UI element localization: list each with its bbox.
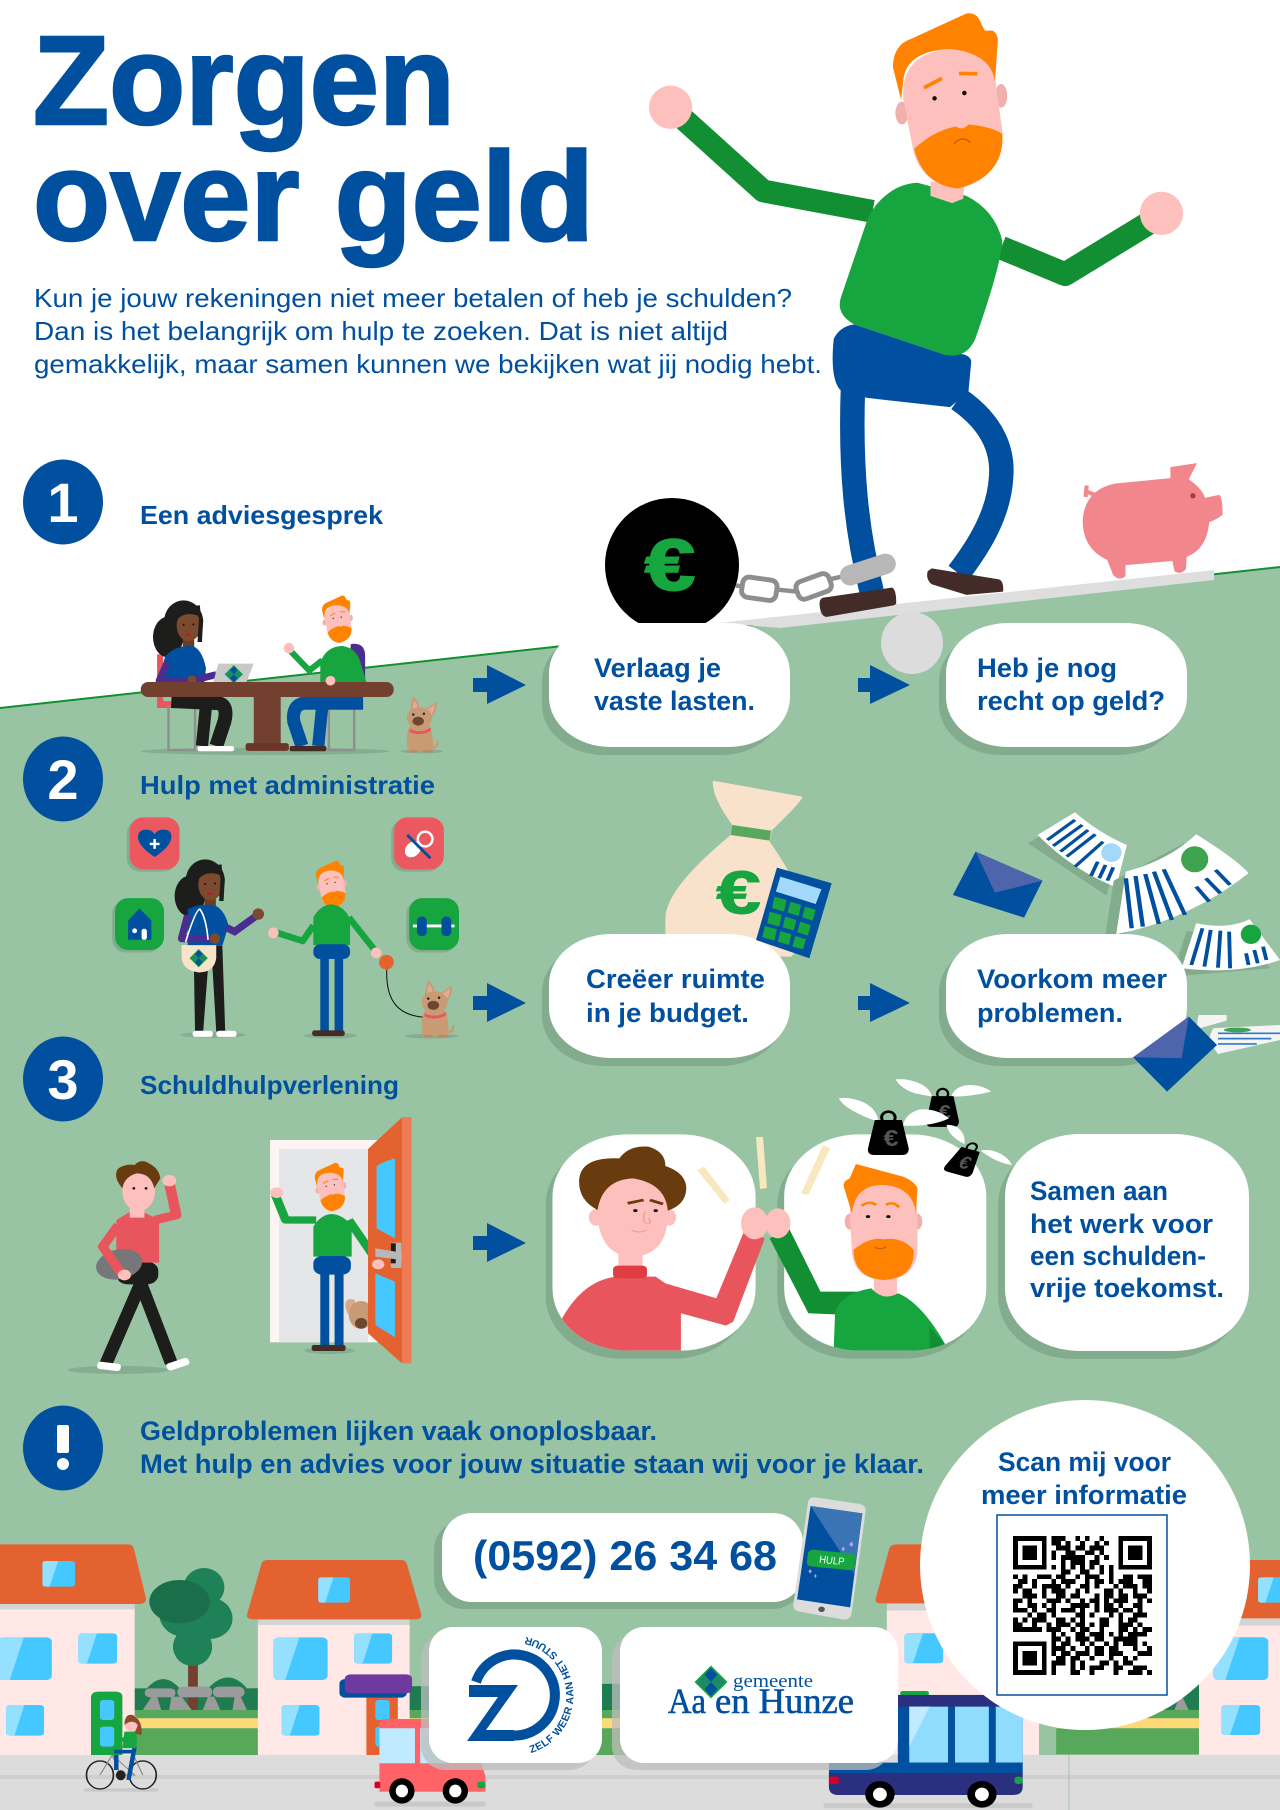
step 2 number: 2 (47, 748, 79, 811)
bubble: Verlaag je vaste lasten (542, 623, 790, 755)
title: over geld (33, 126, 594, 267)
arrow 2a (473, 983, 526, 1022)
open door with man and dog (270, 1117, 411, 1363)
logo box: gemeente Aa en Hunze: en Hunze (715, 1681, 854, 1721)
step 1 number (23, 460, 103, 544)
icon: dumbbell (406, 898, 459, 952)
phone number bubble (434, 1513, 803, 1609)
bus (824, 1691, 1032, 1808)
QR code (1013, 1538, 1152, 1673)
house 3 (876, 1544, 1044, 1755)
dolmen stones (143, 1687, 247, 1710)
cyclist (84, 1715, 158, 1792)
bubble: Voorkom meer problemen: problemen. (977, 998, 1123, 1028)
step 2 illustration (112, 817, 459, 1039)
bill 1 (1028, 812, 1127, 896)
QR circle panel: Scan mij voor (998, 1447, 1171, 1477)
envelope with bills, lower right (1133, 1015, 1280, 1092)
house 4 (1199, 1560, 1280, 1755)
street (0, 1755, 1280, 1810)
bubble: Heb je nog recht op geld (939, 623, 1187, 755)
title (33, 10, 594, 267)
man with dog leash (268, 861, 424, 1039)
arrow 1a (473, 665, 526, 704)
phone with HULP button (793, 1497, 866, 1620)
intro text: gemakkelijk, maar samen kunnen we bekijken wat jij nodig hebt. (34, 349, 822, 379)
bubble: person in red high five (546, 1134, 765, 1359)
bubble: Voorkom meer problemen (939, 934, 1187, 1066)
bill 2 (1104, 834, 1249, 943)
garden and hedge (135, 1677, 889, 1755)
logo box: gemeente Aa en Hunze (612, 1627, 898, 1770)
seesaw plank and pivot (719, 570, 1214, 674)
money bag with euro: € (716, 859, 761, 926)
step 1 heading: Een adviesgesprek (140, 500, 384, 530)
bubble: Verlaag je vaste lasten: vaste lasten. (594, 686, 755, 716)
bubble: man in green high five (770, 1134, 986, 1359)
bubble: Samen aan het werk: het werk voor (1030, 1209, 1214, 1239)
big worried man (649, 13, 1183, 617)
QR circle panel: meer informatie (981, 1480, 1187, 1510)
intro text (34, 283, 822, 379)
closing message (140, 1416, 924, 1479)
logo box: Zelf weer aan het stuur (421, 1627, 602, 1770)
money ball and chain (605, 498, 739, 632)
bubble: Samen aan het werk (998, 1134, 1249, 1359)
dog (405, 980, 458, 1039)
logo box: Zelf weer aan het stuur: ZELF WEER AAN HET STUUR (524, 1636, 574, 1753)
bubble: Verlaag je vaste lasten: Verlaag je (594, 653, 721, 683)
walking person in red (67, 1161, 191, 1374)
tree (149, 1568, 233, 1710)
fist bump (741, 1207, 790, 1239)
step 1 number: 1 (47, 471, 79, 534)
flying debt weights with wings (839, 1079, 1012, 1178)
village scene right (824, 1544, 1280, 1808)
closing message: Met hulp en advies voor jouw situatie staan wij voor je klaar. (140, 1449, 924, 1479)
icon: pacifier (391, 817, 444, 872)
arrow 1b (858, 665, 910, 704)
step 3 heading: Schuldhulpverlening (140, 1070, 399, 1100)
piggy bank (1083, 463, 1223, 579)
bubble: Creeer ruimte in je budget: Creëer ruimte (586, 964, 765, 994)
garden behind circle (1056, 1683, 1199, 1754)
bubble: Voorkom meer problemen: Voorkom meer (977, 964, 1167, 994)
phone number bubble: (0592) 26 34 68 (473, 1532, 777, 1579)
house 1 (0, 1544, 146, 1755)
bubble: Samen aan het werk: vrije toekomst. (1030, 1273, 1224, 1303)
step 1 illustration: advice meeting (141, 596, 443, 755)
bills and envelope scattered (953, 812, 1280, 977)
bubble: Samen aan het werk: een schulden- (1030, 1241, 1206, 1271)
phone with HULP button: HULP (818, 1554, 846, 1568)
step 2 heading: Hulp met administratie (140, 770, 435, 800)
title: Zorgen (33, 10, 455, 151)
bubble: Samen aan het werk: Samen aan (1030, 1176, 1168, 1206)
bubble: Heb je nog recht op geld: recht op geld? (977, 686, 1165, 716)
icon: heart (127, 817, 180, 872)
money bag with euro (665, 781, 811, 957)
bubble: Creeer ruimte in je budget (542, 934, 790, 1066)
green background with sloped hill (0, 567, 1280, 1810)
gap in garden (1039, 1710, 1056, 1755)
bubble: Creeer ruimte in je budget: in je budget. (586, 998, 749, 1028)
icon: calculator (756, 868, 832, 958)
intro text: Kun je jouw rekeningen niet meer betalen of heb je schulden? (34, 283, 792, 313)
car (375, 1719, 486, 1807)
intro text: Dan is het belangrijk om hulp te zoeken. Dat is niet altijd (34, 316, 728, 346)
envelope (953, 852, 1043, 918)
woman with bag (175, 859, 264, 1038)
stick highlight (756, 1137, 767, 1189)
arrow 3 (473, 1223, 526, 1262)
bubble: Heb je nog recht op geld: Heb je nog (977, 653, 1117, 683)
step 3 number (23, 1036, 103, 1122)
logo box: gemeente Aa en Hunze: Aa (668, 1681, 706, 1721)
arrow 2b (858, 983, 910, 1022)
icon: house (112, 898, 164, 952)
QR circle panel (920, 1400, 1250, 1730)
house 2 (247, 1560, 421, 1755)
step 3 number: 3 (47, 1048, 79, 1111)
step 2 number (23, 736, 103, 822)
exclamation number (23, 1406, 103, 1490)
logo box: gemeente Aa en Hunze: gemeente (733, 1671, 813, 1692)
bill 3 (1172, 919, 1280, 977)
closing message: Geldproblemen lijken vaak onoplosbaar. (140, 1416, 657, 1446)
village scene left (0, 1544, 889, 1807)
money ball and chain: € (645, 526, 695, 606)
